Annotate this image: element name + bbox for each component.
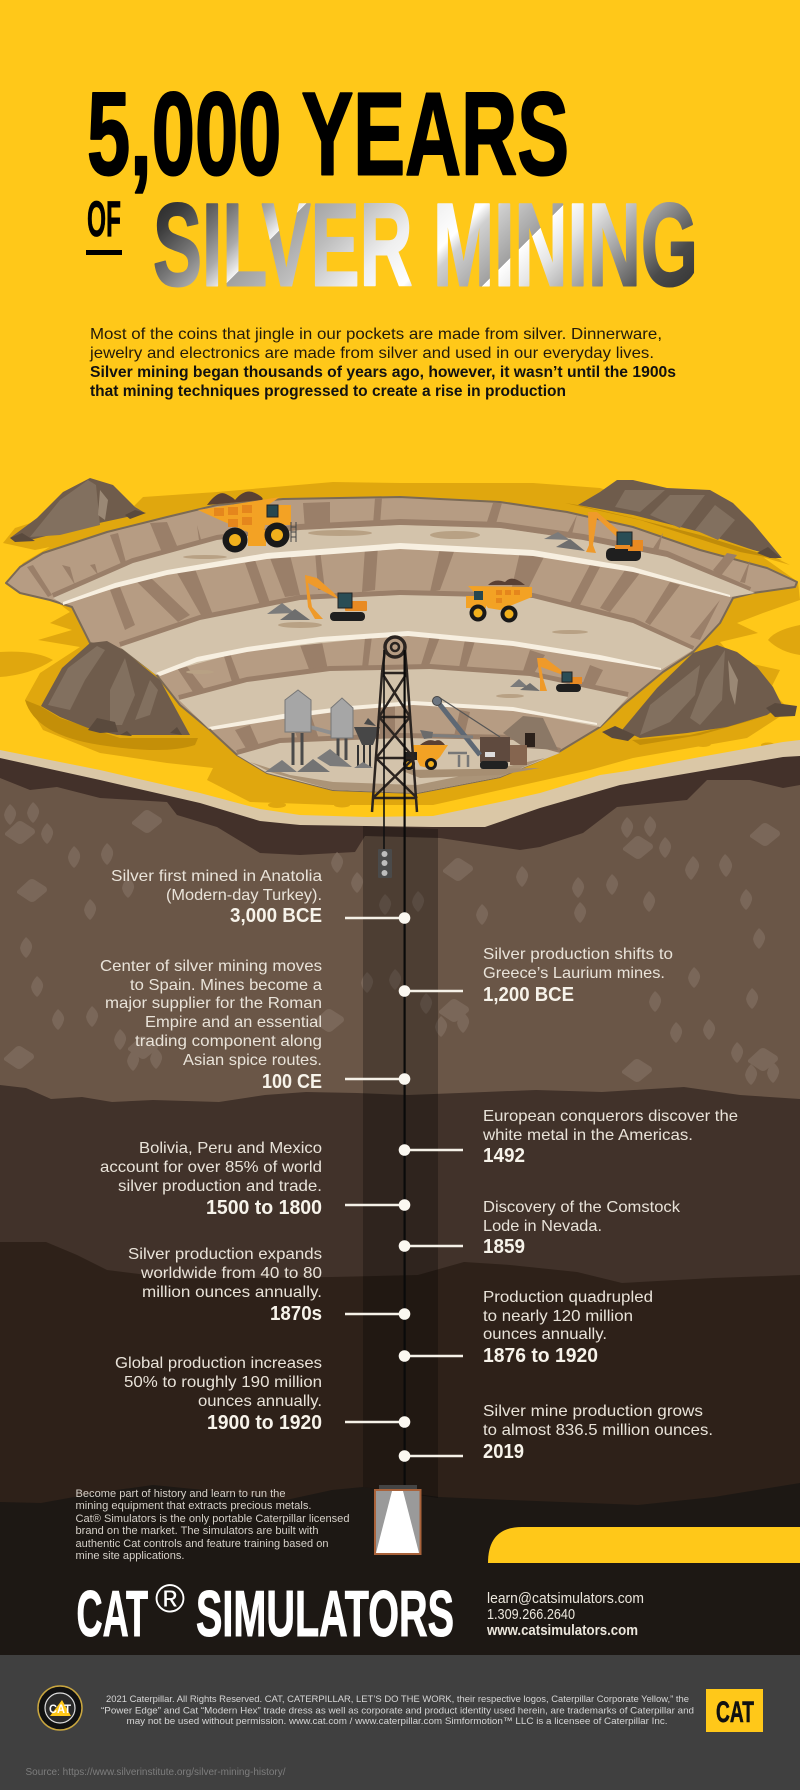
rock speckles (4, 802, 780, 1085)
event: 1870s: Silver production expands (128, 1246, 322, 1263)
dump truck: large (198, 492, 296, 552)
event: 2019: to almost 836.5 million ounces. (483, 1422, 713, 1439)
cat logo (706, 1689, 763, 1732)
rock pile: top left (10, 478, 146, 542)
footer band (0, 1655, 800, 1790)
promo paragraph: Cat® Simulators is the only portable Caterpillar licensed (76, 1513, 350, 1525)
event: 100 CE: Center of silver mining moves (100, 958, 322, 975)
event: 1859: Lode in Nevada. (483, 1218, 602, 1235)
legal text: 2021 Caterpillar. All Rights Reserved. CAT, CATERPILLAR, LET’S DO THE WORK, their respective logos, Caterpillar Corporate Yellow,” the (106, 1694, 689, 1705)
event: 1859 (483, 1199, 681, 1258)
pit outline and walls (6, 497, 797, 793)
event: 1859: Discovery of the Comstock (483, 1199, 681, 1216)
underground layer 4 (0, 1483, 800, 1655)
event: 100 CE (100, 958, 322, 1093)
mine elevator lamp (375, 1485, 420, 1554)
event: 1492: European conquerors discover the (483, 1108, 738, 1125)
event: 1900 to 1920 (115, 1355, 322, 1434)
brand: cat simulators (76, 1577, 454, 1650)
promo paragraph: mine site applications. (76, 1550, 184, 1562)
white bench edges (63, 543, 730, 730)
intro paragraph: Silver mining began thousands of years ago, however, it wasn’t until the 1900s (90, 364, 676, 381)
event: 1492 (482, 1108, 738, 1167)
rock pile: right (602, 645, 797, 745)
event: 100 CE: trading component along (135, 1033, 322, 1050)
open pit mine (6, 497, 797, 793)
event: 1876 to 1920 (483, 1289, 653, 1367)
intro paragraph: that mining techniques progressed to create a rise in production (90, 383, 566, 400)
event: 3,000 BCE: Silver first mined in Anatolia (111, 868, 322, 885)
event: 1492: white metal in the Americas. (482, 1127, 693, 1144)
event: 2019: Silver mine production grows (483, 1403, 703, 1420)
event: 1500 to 1800: Bolivia, Peru and Mexico (139, 1140, 322, 1157)
event: 1870s: worldwide from 40 to 80 (140, 1265, 322, 1282)
intro paragraph: Most of the coins that jingle in our pockets are made from silver. Dinnerware, (90, 326, 662, 343)
signal box on cable (378, 650, 392, 878)
contact details (486, 1590, 644, 1639)
contact details: learn@catsimulators.com (487, 1590, 644, 1607)
timeline dots (399, 912, 410, 1462)
yellow tab (488, 1527, 800, 1563)
promo paragraph: mining equipment that extracts precious metals. (76, 1500, 312, 1512)
title: of: OF (87, 191, 121, 247)
mine entrance (503, 716, 558, 750)
event: 1900 to 1920: Global production increases (115, 1355, 322, 1372)
silos and hopper (265, 690, 380, 772)
mine shaft (363, 826, 438, 1498)
event: 100 CE: to Spain. Mines become a (130, 977, 322, 994)
brand: cat simulators: ® (155, 1577, 185, 1621)
bench floors (53, 525, 755, 793)
event: 2019 (483, 1403, 713, 1463)
underground layer 1 (0, 756, 800, 1110)
underground layer 2 (0, 1085, 800, 1300)
contact details: www.catsimulators.com (486, 1622, 638, 1639)
promo paragraph: brand on the market. The simulators are built with (76, 1525, 318, 1537)
promo paragraph (76, 1488, 350, 1562)
timeline connectors (345, 918, 463, 1456)
brand: cat simulators: CAT (76, 1577, 148, 1650)
event: 1870s: million ounces annually. (142, 1284, 322, 1301)
cat logo: CAT (716, 1696, 754, 1729)
source line: Source: https://www.silverinstitute.org/silver-mining-history/ (26, 1766, 286, 1778)
event: 100 CE: Asian spice routes. (183, 1052, 322, 1069)
wall streaks (27, 498, 750, 755)
event: 1492: 1492 (483, 1145, 525, 1167)
electric shovel (420, 696, 527, 769)
promo paragraph: Become part of history and learn to run the (76, 1488, 286, 1500)
event: 100 CE: 100 CE (262, 1071, 322, 1093)
title: of (86, 191, 122, 255)
intro paragraph: jewelry and electronics are made from silver and used in our everyday lives. (89, 345, 654, 362)
floor marks (183, 530, 588, 698)
ground cross-section: cream edge (0, 740, 800, 860)
event: 1500 to 1800: account for over 85% of world (100, 1159, 322, 1176)
contact details: 1.309.266.2640 (487, 1606, 575, 1623)
legal text: “Power Edge” and Cat “Modern Hex” trade dress as well as corporate and product identity used herein, are trademarks of Caterpillar and (101, 1706, 694, 1716)
shaft cable (404, 650, 406, 1488)
legal text (101, 1694, 694, 1727)
event: 1870s (128, 1246, 322, 1325)
event: 3,000 BCE: 3,000 BCE (230, 905, 322, 927)
event: 1876 to 1920: Production quadrupled (483, 1289, 653, 1306)
event: 1876 to 1920: ounces annually. (483, 1326, 607, 1343)
event: 1870s: 1870s (270, 1303, 322, 1325)
event: 1500 to 1800: silver production and trade. (118, 1178, 322, 1195)
event: 1,200 BCE: Greece’s Laurium mines. (483, 965, 665, 982)
promo paragraph: authentic Cat controls and feature training based on (76, 1538, 328, 1550)
headframe tower (372, 637, 417, 812)
event: 3,000 BCE: (Modern-day Turkey). (166, 887, 322, 904)
event: 100 CE: Empire and an essential (145, 1014, 322, 1031)
intro paragraph (89, 326, 676, 400)
legal text: may not be used without permission. www.cat.com / www.caterpillar.com Simformotion™ LLC is a licensee of Caterpillar Inc. (126, 1716, 668, 1727)
rock pile: left (25, 641, 198, 750)
dump truck: bottom and trestle (403, 740, 468, 770)
event: 1,200 BCE (483, 946, 673, 1006)
rock pile: top right (562, 480, 790, 565)
event: 1,200 BCE: 1,200 BCE (483, 984, 574, 1006)
event: 100 CE: major supplier for the Roman (105, 995, 322, 1012)
bench base strips (53, 522, 750, 753)
event: 1876 to 1920: to nearly 120 million (483, 1308, 633, 1325)
event: 3,000 BCE (111, 868, 322, 927)
yellow ground shading (0, 482, 800, 808)
bowl floor shading (250, 758, 545, 793)
event: 2019: 2019 (483, 1441, 524, 1463)
event: 1900 to 1920: 50% to roughly 190 million (124, 1374, 322, 1391)
seal logo (38, 1686, 82, 1730)
excavator: top right (544, 512, 643, 561)
underground layer 3 (0, 1242, 800, 1520)
excavator: middle left (267, 575, 367, 621)
seal logo: CAT (49, 1702, 72, 1716)
event: 1900 to 1920: 1900 to 1920 (207, 1412, 322, 1434)
brand: cat simulators: SIMULATORS (196, 1577, 454, 1650)
event: 1500 to 1800 (100, 1140, 322, 1219)
event: 1500 to 1800: 1500 to 1800 (206, 1197, 322, 1219)
event: 1900 to 1920: ounces annually. (198, 1393, 322, 1410)
title: 5,000 years: 5,000 YEARS (87, 68, 569, 200)
event: 1859: 1859 (483, 1236, 525, 1258)
event: 1876 to 1920: 1876 to 1920 (483, 1345, 598, 1367)
event: 1,200 BCE: Silver production shifts to (483, 946, 673, 963)
excavator: lower right (510, 658, 582, 692)
dump truck: middle (466, 579, 532, 622)
